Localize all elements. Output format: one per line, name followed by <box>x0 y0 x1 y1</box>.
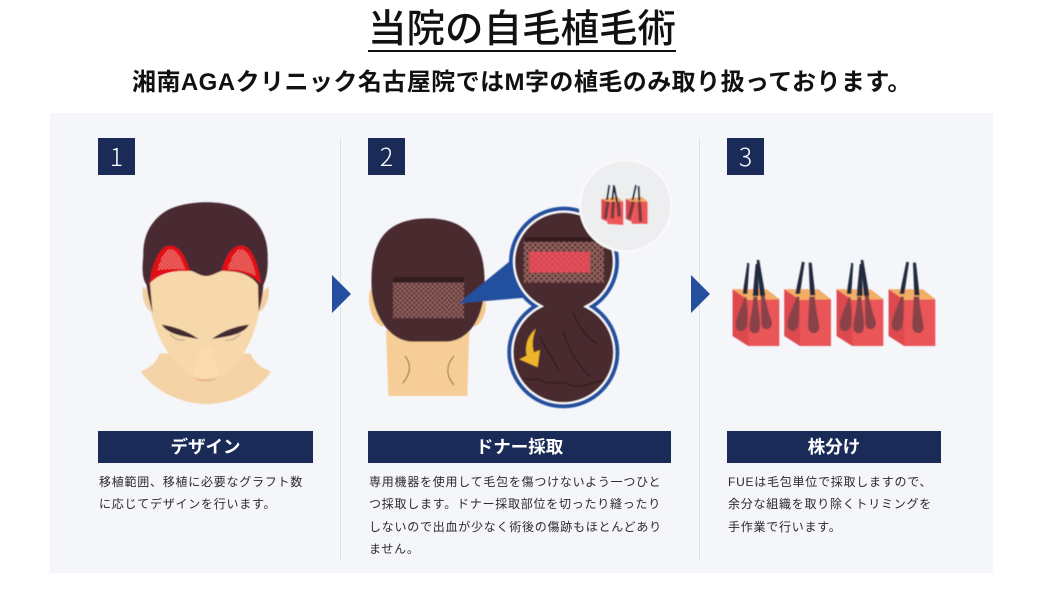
donor patch <box>393 283 464 318</box>
icon: back of head donor area <box>369 160 671 408</box>
arrow: step 1 to 2 <box>332 275 351 313</box>
ears <box>143 287 269 312</box>
illustrations and arrows <box>140 162 936 410</box>
nose <box>193 347 220 378</box>
step 2 number: 2 <box>380 138 393 174</box>
step 3 text: FUEは毛包単位で採取しますので、 <box>728 475 932 489</box>
step 2 heading <box>368 431 671 463</box>
step 1 number <box>98 138 135 175</box>
step 3 text: 手作業で行います。 <box>728 520 842 534</box>
yellow arrow <box>519 329 540 367</box>
red M area left <box>149 246 190 284</box>
step 1 text: 移植範囲、移植に必要なグラフト数 <box>99 475 303 489</box>
title: 当院の自毛植毛術 <box>368 8 676 51</box>
step 2 text: ません。 <box>369 542 420 556</box>
ears <box>369 290 486 327</box>
step 2 text: つ採取します。ドナー採取部位を切ったり縫ったり <box>369 497 661 511</box>
step 2 heading: ドナー採取 <box>476 437 563 457</box>
step 2 number <box>368 138 405 175</box>
lower magnifier circle <box>507 296 619 408</box>
follicle circle <box>580 160 671 251</box>
red M area right <box>221 246 261 284</box>
face <box>147 262 263 380</box>
icon: face with M-shaped hairline <box>141 202 271 404</box>
hair strands <box>525 313 603 386</box>
step 3 number: 3 <box>739 138 752 174</box>
step 2 text: 専用機器を使用して毛包を傷つけないよう一つひと <box>369 475 661 489</box>
neck creases <box>403 356 409 383</box>
panel: steps background <box>50 113 993 573</box>
step 3 text <box>728 475 932 534</box>
magnified patch <box>525 237 605 242</box>
callout pointer <box>458 258 528 303</box>
step 2 text: しないので出血が少なく術後の傷跡もほとんどあり <box>369 520 662 534</box>
step 3 number <box>727 138 764 175</box>
step 3 text: 余分な組織を取り除くトリミングを <box>728 497 932 511</box>
hair <box>143 202 268 313</box>
icon: hair follicle grafts <box>733 260 935 346</box>
step 1 text: に応じてデザインを行います。 <box>99 497 276 511</box>
step 1 text <box>99 475 303 511</box>
step 2 text <box>369 475 662 556</box>
neck <box>386 330 469 396</box>
hair <box>371 218 485 342</box>
step 1 heading: デザイン <box>170 437 240 457</box>
arrow: step 2 to 3 <box>691 275 710 313</box>
step 1 heading <box>98 431 313 463</box>
subtitle: 湘南AGAクリニック名古屋院ではM字の植毛のみ取り扱っております。 <box>132 69 912 96</box>
eyebrows and eyes <box>162 325 199 339</box>
neck and shoulders <box>141 353 271 404</box>
upper magnifier circle <box>509 207 619 317</box>
step 3 heading: 株分け <box>808 437 860 457</box>
step 1 number: 1 <box>110 138 123 174</box>
step 3 heading <box>727 431 941 463</box>
